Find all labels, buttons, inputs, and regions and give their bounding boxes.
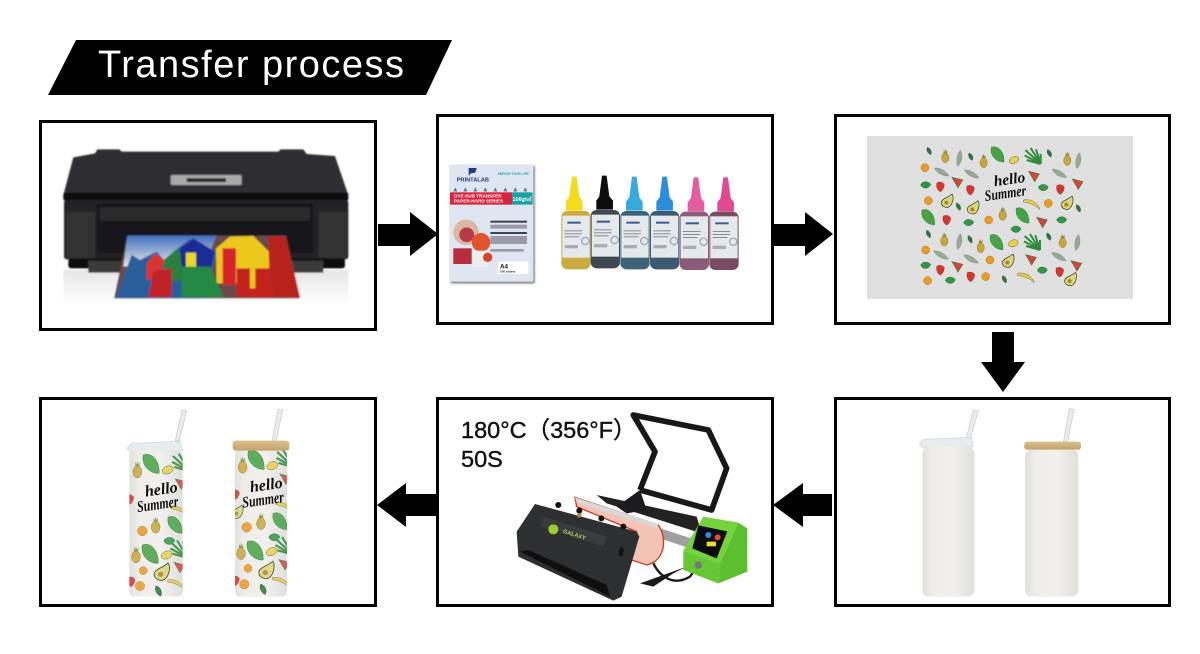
icon: printed tumblers: Summer [136, 493, 180, 516]
icon: transfer paper pack: ENRICH YOUR LIFE [498, 172, 530, 176]
panel: blank tumblers [836, 398, 1170, 606]
icon: printed tumblers: hello [144, 479, 179, 501]
icon: transfer paper pack [449, 165, 535, 283]
arrow: printer to supplies [378, 212, 438, 256]
text: time and temperature: 180°C（356°F） [461, 417, 637, 443]
icon: printed tumblers [126, 409, 294, 597]
title banner: Transfer process [98, 44, 404, 86]
panel: printer [40, 122, 376, 330]
icon: transfer paper pack: PAPER-HARD SERIES [454, 199, 503, 204]
panel: finished tumblers [40, 398, 376, 606]
icon: printed tumblers: hello [249, 475, 284, 496]
icon: ink bottles [561, 176, 739, 270]
chart: fruit pattern sheet: hello [993, 169, 1027, 190]
text: time and temperature [461, 417, 637, 472]
chart: fruit pattern sheet [921, 147, 1083, 286]
icon: mug press machine: GALAXY [562, 529, 587, 542]
panel: printed pattern [836, 116, 1170, 324]
icon: transfer paper pack: DYE-SUB TRANSFER [454, 194, 502, 199]
text: time and temperature: 50S [461, 446, 503, 472]
icon: mug press machine [517, 415, 747, 601]
icon: transfer paper pack: 106g/㎡ [513, 196, 532, 203]
panel: paper and inks [438, 116, 772, 324]
icon: transfer paper pack: A4 [500, 264, 509, 271]
chart: fruit pattern sheet: Summer [984, 182, 1028, 205]
arrow: pattern to blanks [981, 332, 1025, 392]
panel: heat press [438, 398, 772, 606]
icon: blank tumblers [919, 409, 1081, 597]
icon: transfer paper pack: PRINTALAB [457, 177, 489, 183]
arrow: supplies to pattern [773, 212, 833, 256]
arrow: blanks to press [773, 483, 832, 527]
icon: printer [63, 149, 348, 305]
title banner [48, 40, 452, 95]
icon: transfer paper pack: 100 sheets [500, 270, 516, 274]
icon: printed tumblers: Summer [241, 489, 285, 512]
arrow: press to finished [377, 483, 436, 527]
